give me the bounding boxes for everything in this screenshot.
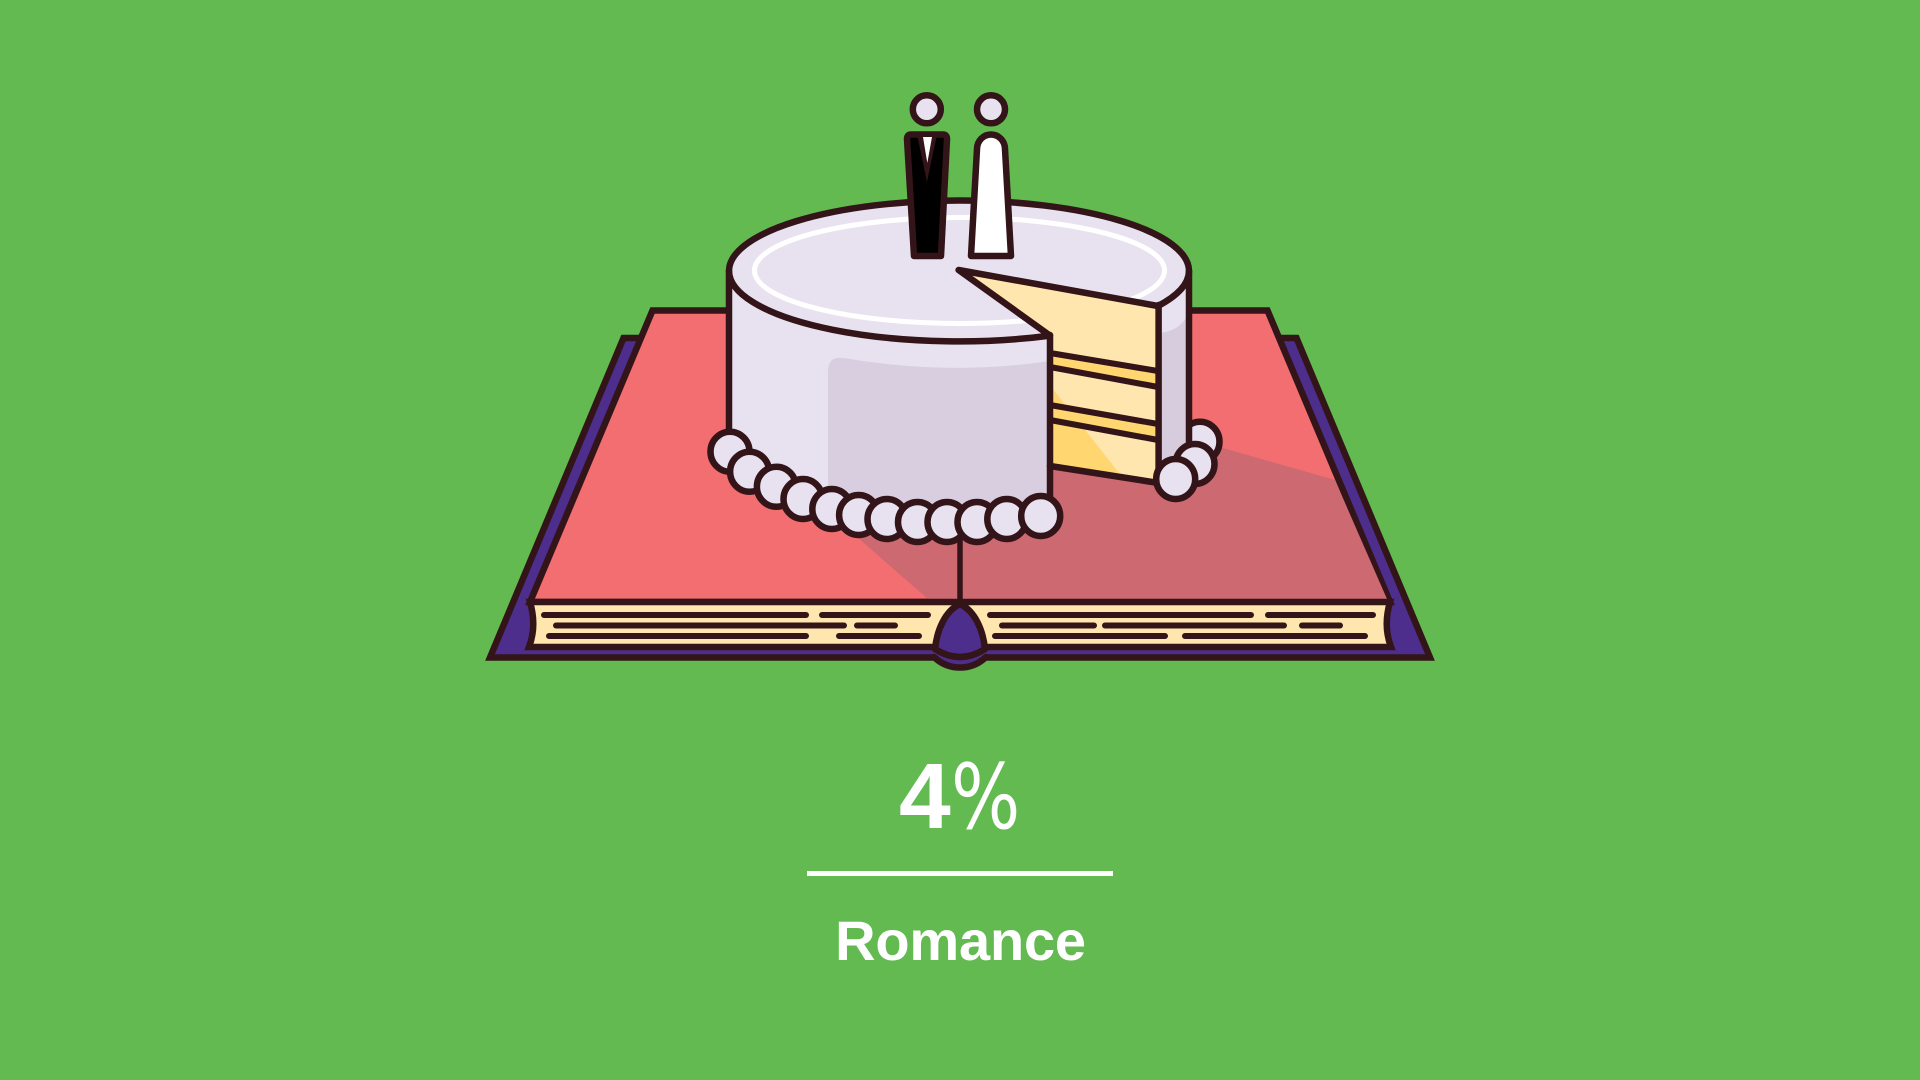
stat: 4% (899, 744, 1020, 850)
cake top surface (729, 200, 1189, 341)
stat: 4%: % (951, 745, 1020, 850)
page block right (962, 602, 1391, 647)
stat: 4%: 4 (899, 744, 951, 848)
icing ring (754, 218, 1164, 324)
spine (935, 604, 985, 657)
red book page (530, 310, 1390, 602)
back right bead (1180, 422, 1220, 462)
book cover (490, 338, 1430, 658)
cast shadow on page (857, 440, 1387, 599)
cake topper: groom (907, 95, 947, 256)
book (490, 310, 1430, 668)
cake front side (729, 271, 1050, 522)
pearl beads (710, 432, 1214, 542)
page centre fold (957, 510, 963, 602)
cake topper: bride (971, 95, 1011, 256)
page block left (529, 602, 958, 647)
label: Romance: Romance (835, 909, 1086, 972)
divider rule (807, 871, 1113, 876)
cake side shadow (828, 358, 1050, 522)
cake slice cut (959, 270, 1159, 483)
cake right side (1158, 271, 1190, 483)
cake (710, 200, 1220, 542)
spine bulge (933, 648, 987, 668)
cake outlines (729, 200, 1189, 500)
page text lines (544, 615, 1373, 636)
